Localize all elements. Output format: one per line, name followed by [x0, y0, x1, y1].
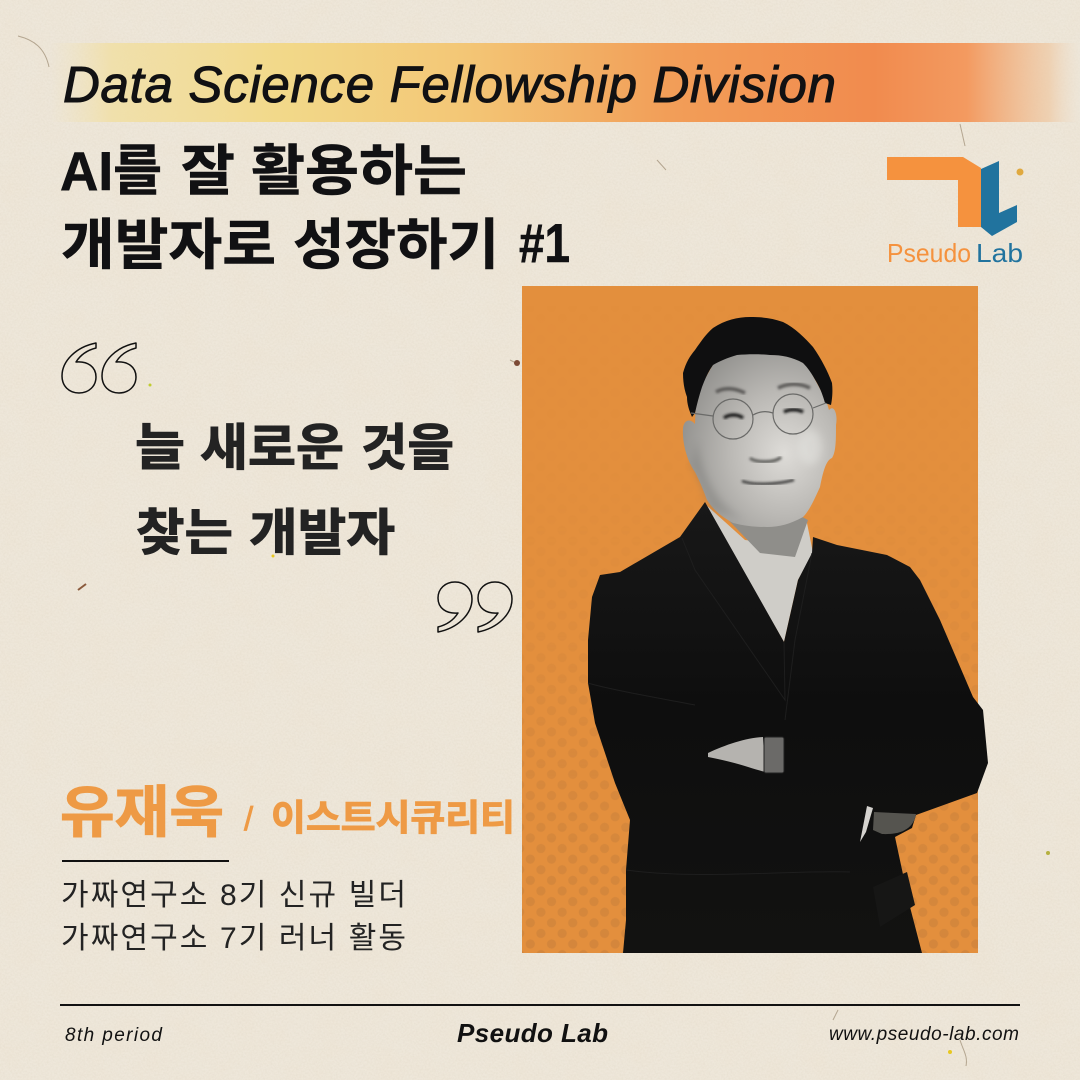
- mouth: [742, 480, 794, 484]
- main heading: [60, 140, 570, 276]
- pocket flap: [873, 872, 915, 927]
- quote text: 개발자: [249, 505, 395, 561]
- speaker bio: 가짜연구소 7기 러너 활동: [61, 922, 406, 955]
- footer rule: [60, 1004, 1020, 1006]
- eyes: [724, 410, 803, 418]
- cheek highlight: [798, 429, 822, 465]
- quote text: 늘: [135, 420, 185, 476]
- speaker name and company: [60, 781, 515, 844]
- glasses: [691, 394, 826, 439]
- footer text: [65, 1018, 1019, 1048]
- portrait of speaker: [588, 317, 988, 953]
- footer text: 8th period: [65, 1025, 163, 1046]
- shirt: [704, 503, 813, 642]
- right hand and cuff: [873, 812, 916, 834]
- divider under name: [62, 860, 229, 862]
- logo: Pseudo Lab: Pseudo: [887, 238, 971, 268]
- hair: [683, 317, 832, 417]
- eyebrows: [716, 384, 810, 393]
- logo: Pseudo Lab: Lab: [976, 238, 1023, 268]
- ear and face: [683, 352, 837, 527]
- opening quote mark: [62, 343, 136, 393]
- speaker name and company: 이스트시큐리티: [271, 797, 515, 838]
- header band: [50, 43, 1080, 122]
- nose: [750, 457, 781, 462]
- footer text: www.pseudo-lab.com: [829, 1024, 1019, 1045]
- jacket: [588, 502, 988, 953]
- quote text: 찾는: [136, 505, 233, 561]
- hand and watch: [708, 737, 765, 772]
- quote text: 것을: [361, 420, 454, 476]
- main heading: 성장하기: [293, 214, 499, 276]
- main heading: 활용하는: [251, 140, 467, 202]
- quote text: [135, 420, 454, 561]
- speaker bio: 가짜연구소 8기 신규 빌더: [61, 879, 406, 912]
- band title: Data Science Fellowship Division: [63, 56, 836, 113]
- logo: Pseudo Lab: [887, 157, 1023, 268]
- main heading: AI를: [60, 140, 162, 202]
- photo panel: [522, 286, 988, 953]
- quote text: 새로운: [200, 420, 344, 476]
- jaw shadow: [692, 440, 745, 520]
- speaker bio: [61, 879, 406, 955]
- speaker name and company: 유재욱: [60, 781, 224, 844]
- main heading: #1: [519, 212, 570, 274]
- speaker name and company: /: [244, 800, 254, 837]
- jacket fold lines: [588, 538, 850, 875]
- neck: [712, 500, 808, 557]
- footer text: Pseudo Lab: [457, 1018, 608, 1048]
- main heading: 잘: [181, 140, 235, 202]
- closing quote mark: [438, 582, 512, 632]
- main heading: 개발자로: [61, 214, 276, 276]
